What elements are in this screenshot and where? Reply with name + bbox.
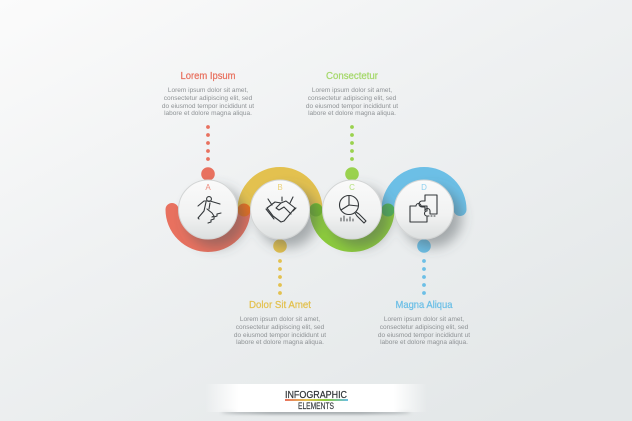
- heading C: Consectetur: [326, 70, 378, 82]
- text B: labore et dolore magna aliqua.: [236, 339, 324, 346]
- banner: ELEMENTS: [298, 401, 334, 411]
- banner: [205, 384, 427, 414]
- disc letters: D: [421, 183, 427, 192]
- text C: consectetur adipiscing elit, sed: [308, 95, 397, 102]
- connector A: [201, 125, 215, 181]
- arc ribbons: [172, 174, 460, 246]
- text C: Lorem ipsum dolor sit amet,: [312, 87, 392, 94]
- text A: Lorem ipsum dolor sit amet,: [168, 87, 248, 94]
- junction dots: [238, 204, 394, 216]
- text C: labore et dolore magna aliqua.: [308, 110, 396, 117]
- icon: magnifier with pie chart: [340, 196, 366, 223]
- heading D: Magna Aliqua: [396, 299, 453, 311]
- text D: Lorem ipsum dolor sit amet,: [384, 316, 464, 323]
- disc letters: C: [349, 183, 355, 192]
- text B: consectetur adipiscing elit, sed: [236, 324, 325, 331]
- text B: [234, 316, 326, 346]
- disc letters: B: [277, 183, 283, 192]
- discs: [178, 180, 454, 239]
- icon: handshake: [266, 197, 296, 222]
- text D: consectetur adipiscing elit, sed: [380, 324, 469, 331]
- connector B: [273, 239, 287, 295]
- arc D blue: [388, 174, 460, 210]
- arc C green: [316, 210, 388, 246]
- disc letters: A: [205, 183, 211, 192]
- text A: labore et dolore magna aliqua.: [164, 110, 252, 117]
- arc B yellow: [244, 174, 316, 210]
- heading B: Dolor Sit Amet: [249, 299, 311, 311]
- icon: puzzle pieces: [410, 195, 437, 222]
- text A: [162, 87, 254, 117]
- arc A red: [172, 210, 244, 246]
- text D: labore et dolore magna aliqua.: [380, 339, 468, 346]
- icon: climbing figure: [198, 197, 221, 223]
- text A: do eiusmod tempor incididunt ut: [162, 103, 254, 110]
- text A: consectetur adipiscing elit, sed: [164, 95, 253, 102]
- text C: do eiusmod tempor incididunt ut: [306, 103, 398, 110]
- banner: INFOGRAPHIC: [285, 390, 347, 401]
- connector D: [417, 239, 431, 295]
- disc letters: [205, 183, 427, 192]
- text D: do eiusmod tempor incididunt ut: [378, 332, 470, 339]
- text C: [306, 87, 398, 117]
- text B: Lorem ipsum dolor sit amet,: [240, 316, 320, 323]
- heading A: Lorem Ipsum: [180, 70, 236, 82]
- text B: do eiusmod tempor incididunt ut: [234, 332, 326, 339]
- text D: [378, 316, 470, 346]
- connector C: [345, 125, 359, 181]
